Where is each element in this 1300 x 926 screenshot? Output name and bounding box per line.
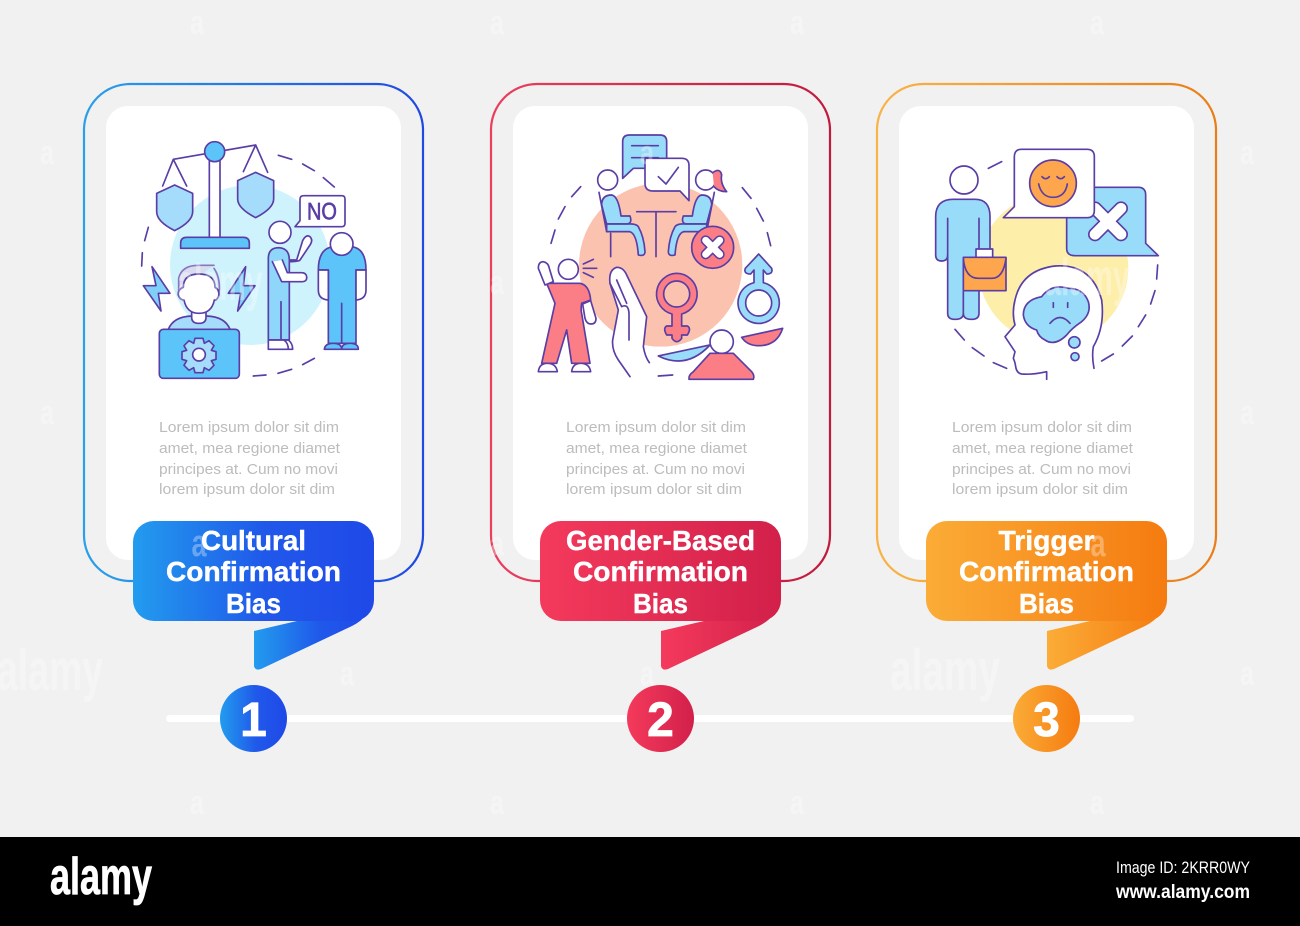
panel card: white <box>106 106 401 560</box>
watermarks: a <box>640 655 655 693</box>
watermarks: a <box>1090 784 1105 822</box>
watermarks: a <box>1090 4 1105 42</box>
ribbon label <box>926 521 1167 621</box>
body text: Lorem ipsum dolor sit dim <box>159 419 339 436</box>
watermarks: a <box>340 655 355 693</box>
ribbon tail <box>254 595 374 670</box>
watermarks: a <box>640 134 655 172</box>
body text: principes at. Cum no movi <box>952 461 1131 478</box>
watermarks: a <box>190 4 205 42</box>
ribbon label <box>540 521 781 621</box>
body text <box>159 419 341 498</box>
watermarks: a <box>490 525 505 563</box>
ribbon heading: Confirmation <box>959 556 1134 587</box>
ribbon heading: Confirmation <box>166 556 341 587</box>
body text: principes at. Cum no movi <box>159 461 338 478</box>
panel: trigger confirmation bias <box>877 84 1216 752</box>
watermarks: a <box>192 523 207 565</box>
panel card: white <box>513 106 808 560</box>
watermarks: a <box>490 264 505 302</box>
watermarks: a <box>1240 655 1255 693</box>
body text <box>952 419 1134 498</box>
watermarks: a <box>1240 394 1255 432</box>
number badge 1 <box>220 685 287 752</box>
watermarks: a <box>490 784 505 822</box>
ribbon heading: Bias <box>226 588 281 619</box>
body text: principes at. Cum no movi <box>566 461 745 478</box>
panel outline: blue <box>84 84 423 581</box>
ribbon heading: Bias <box>1019 588 1074 619</box>
watermarks: alamy <box>1044 249 1130 307</box>
timeline line <box>166 715 1134 722</box>
body text: amet, mea regione diamet <box>566 440 748 457</box>
ribbon heading <box>959 525 1134 619</box>
body text: Lorem ipsum dolor sit dim <box>952 419 1132 436</box>
body text: lorem ipsum dolor sit dim <box>566 481 742 498</box>
ribbon heading: Trigger <box>998 525 1095 556</box>
ribbon heading: Cultural <box>201 525 306 556</box>
watermarks: a <box>1240 134 1255 172</box>
number badge 1: 1 <box>240 694 267 747</box>
number badge 2 <box>627 685 694 752</box>
body text: Lorem ipsum dolor sit dim <box>566 419 746 436</box>
panel outline: orange <box>877 84 1216 581</box>
footer logo: alamy <box>50 848 152 906</box>
footer bar <box>0 837 1300 926</box>
watermarks: a <box>40 394 55 432</box>
ribbon heading: Bias <box>633 588 688 619</box>
body text: amet, mea regione diamet <box>159 440 341 457</box>
watermarks: alamy <box>0 638 103 703</box>
panel: gender-based confirmation bias <box>491 84 830 752</box>
number badge 2: 2 <box>647 694 674 747</box>
footer image id: Image ID: 2KRR0WY <box>1116 858 1250 877</box>
panel: cultural confirmation bias <box>84 84 423 752</box>
watermarks: a <box>490 4 505 42</box>
number badge 3 <box>1013 685 1080 752</box>
body text <box>566 419 748 498</box>
body text: amet, mea regione diamet <box>952 440 1134 457</box>
ribbon heading <box>166 525 341 619</box>
number badge 3: 3 <box>1033 694 1060 747</box>
watermarks: a <box>790 4 805 42</box>
panel outline: red <box>491 84 830 581</box>
illustration: scales, refusal and laptop user: NO <box>307 199 337 226</box>
body text: lorem ipsum dolor sit dim <box>952 481 1128 498</box>
watermarks: a <box>1090 523 1106 565</box>
illustration: man with briefcase, mood bubbles and head <box>936 149 1158 379</box>
ribbon tail <box>661 595 781 670</box>
body text: lorem ipsum dolor sit dim <box>159 481 335 498</box>
footer url: www.alamy.com <box>1115 882 1250 903</box>
ribbon heading: Confirmation <box>573 556 748 587</box>
illustration: conversation, gender symbols and scale <box>538 135 783 379</box>
panel card: white <box>899 106 1194 560</box>
watermarks: a <box>790 784 805 822</box>
watermarks: alamy <box>890 638 1000 703</box>
watermarks: a <box>40 134 55 172</box>
illustration: scales, refusal and laptop user <box>142 142 366 378</box>
ribbon tail <box>1047 595 1167 670</box>
ribbon heading: Gender-Based <box>566 525 755 556</box>
ribbon heading <box>566 525 755 619</box>
watermarks: a <box>190 784 205 822</box>
ribbon label <box>133 521 374 621</box>
watermarks: alamy <box>178 254 263 312</box>
